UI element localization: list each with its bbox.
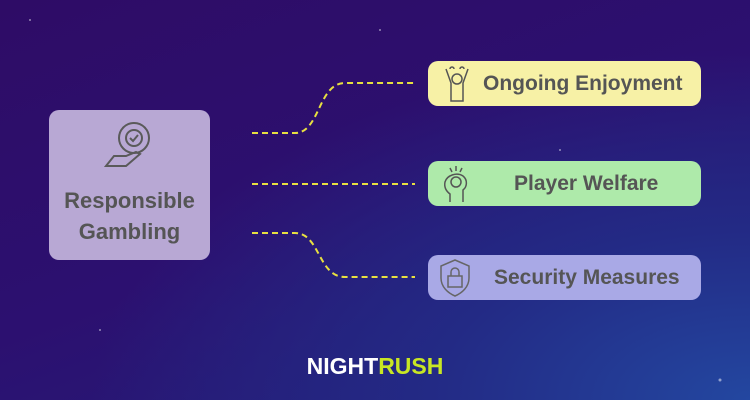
pill: Ongoing Enjoyment [428, 61, 701, 106]
logo: NIGHTRUSH: NIGHTRUSH [307, 353, 443, 379]
pill: Player Welfare [428, 161, 701, 206]
icon: shield lock [440, 259, 470, 297]
title text: Responsible [64, 188, 195, 213]
title text: Gambling [79, 219, 180, 244]
pill: Player Welfare: Player Welfare [514, 172, 658, 195]
panel: Responsible Gambling [49, 110, 210, 260]
title text [64, 188, 195, 244]
icon: cheering person [445, 66, 469, 102]
icon: head with brain [444, 166, 468, 202]
pill: Ongoing Enjoyment: Ongoing Enjoyment [483, 72, 682, 95]
pill: Security Measures [428, 255, 701, 300]
pill: Security Measures: Security Measures [494, 266, 680, 289]
icon: gear in hand [104, 122, 150, 167]
